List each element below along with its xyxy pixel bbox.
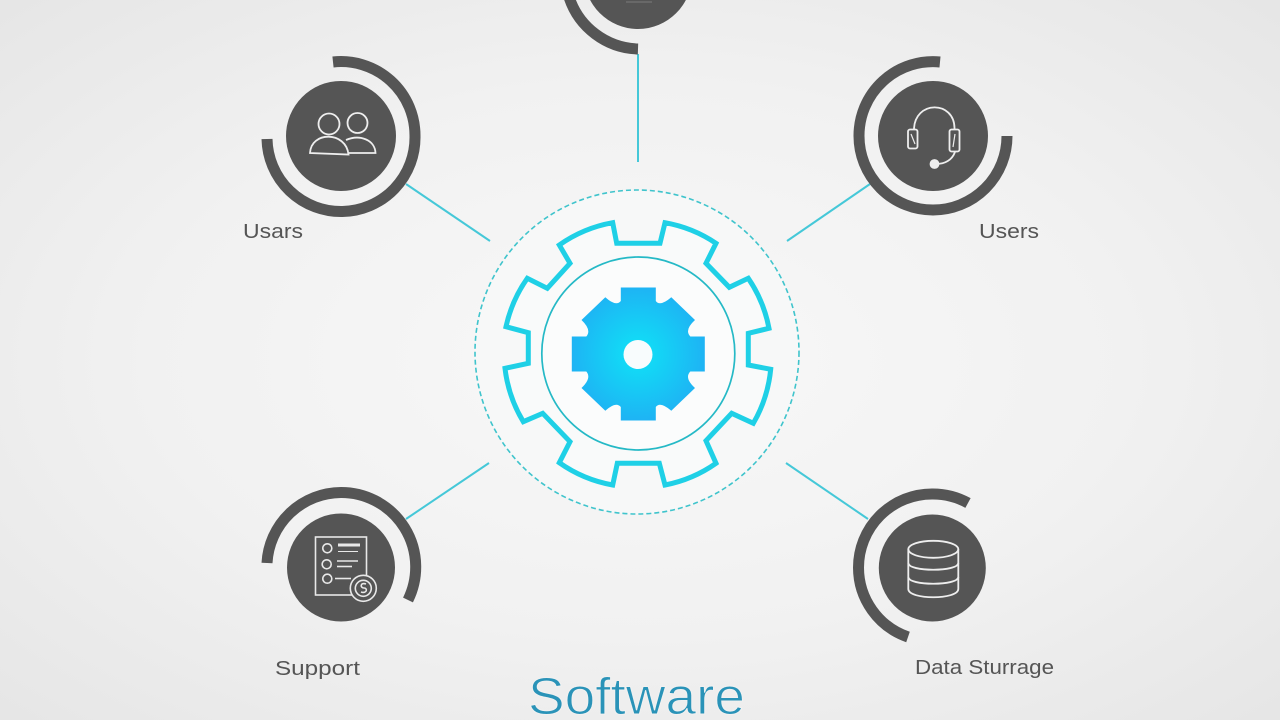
gear centre hole [624,340,652,369]
node: users right [859,62,1039,243]
label: Support [275,658,361,680]
label: Usars [243,221,303,243]
icon: database [908,541,958,597]
ring [858,494,968,637]
node: top (cropped) [569,0,692,49]
icon: two people [310,113,376,154]
label: Data Sturrage [915,657,1054,679]
inner thin ring [542,257,735,450]
disc [286,81,396,191]
top node icon fragment [626,1,652,3]
icon: headset [908,107,960,168]
ring [267,492,416,600]
top node ring [569,0,638,49]
connector lines [406,54,870,519]
node: data storage [858,494,1054,679]
outer gear outline [505,223,771,485]
hub glow background [475,190,799,514]
disc [878,81,988,191]
dashed outer ring [475,190,799,514]
top node disc [584,0,692,29]
disc [287,514,395,622]
ring [859,62,1007,210]
label: Users [979,221,1039,243]
node: support [267,492,416,680]
central gear hub [475,190,799,514]
solid inner gear [572,288,705,420]
ring [267,62,415,212]
node: users left [243,62,415,243]
icon: checklist with badge [316,537,376,601]
disc [879,514,986,622]
